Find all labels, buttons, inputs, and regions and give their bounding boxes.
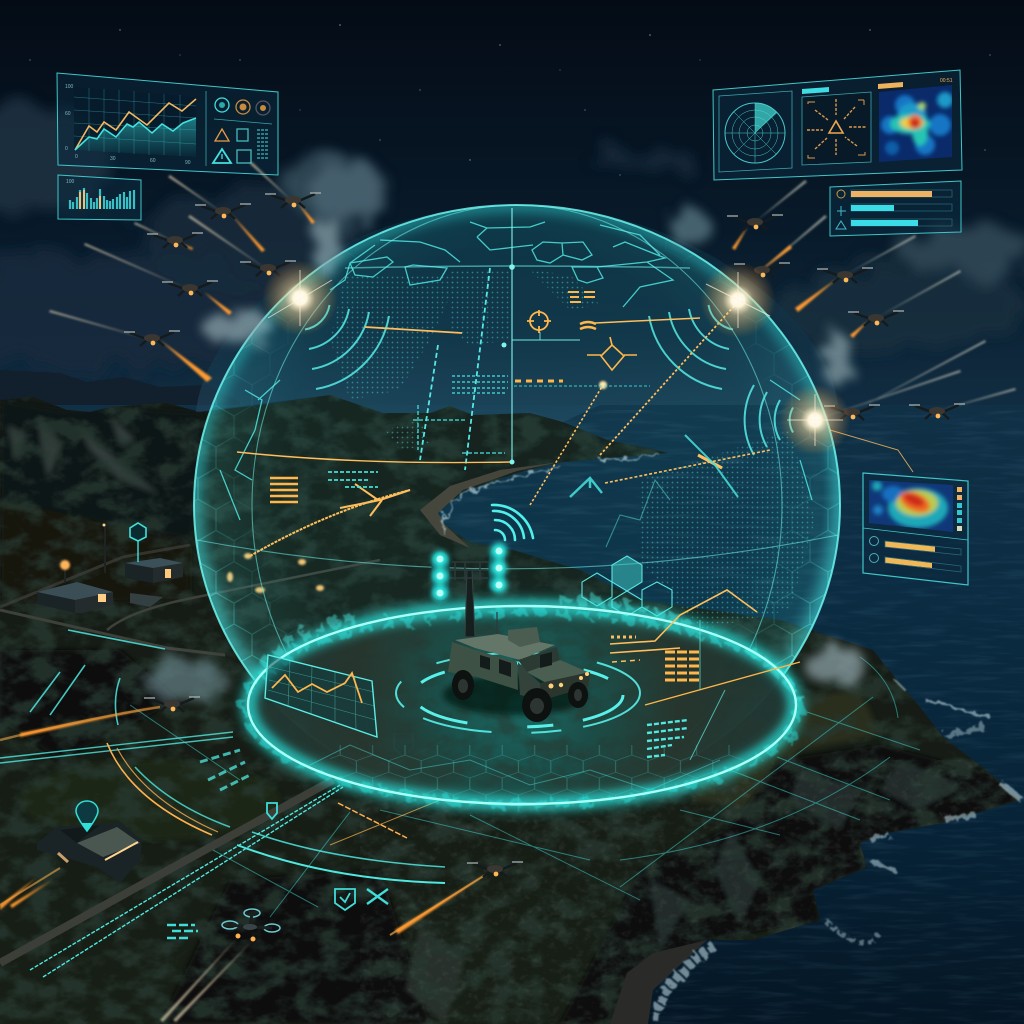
energy ring core (248, 606, 796, 804)
axis labels: 60 (150, 158, 156, 164)
vehicle shadow (443, 675, 587, 715)
drones (124, 193, 965, 877)
terrain shading (0, 400, 1020, 1024)
hex mesh on sphere (195, 252, 839, 665)
status icons (213, 98, 270, 163)
panel: small bar chart: 100 (66, 179, 75, 185)
area under lines (75, 118, 196, 157)
main meridian line (502, 208, 580, 464)
threat heat map (878, 82, 953, 162)
panel: line chart dashboard (57, 73, 278, 175)
quadcopter lower left (222, 909, 280, 942)
HUD: orange data bars (270, 292, 596, 502)
HUD inside dome right (610, 590, 800, 760)
sea ripple texture (440, 410, 1024, 1024)
beach and surf (420, 455, 1022, 1024)
land (0, 395, 1020, 1024)
axis labels: 60 (65, 111, 71, 117)
sphere rim (194, 205, 840, 805)
panel: status bars (830, 181, 961, 236)
building: lower left bunker (37, 822, 142, 883)
cyan ground lines (0, 630, 445, 977)
chart grid (74, 88, 196, 156)
far mountains (0, 370, 240, 430)
orange ground trajectories (0, 707, 485, 935)
icon: wifi signal (492, 505, 533, 540)
building: left base (37, 582, 113, 613)
orange line (75, 99, 196, 150)
sea (0, 405, 1024, 1024)
dome floor (250, 607, 794, 803)
building: right base (125, 553, 324, 607)
panel: thermal map with gauges (863, 473, 968, 585)
panel: small bar chart (58, 175, 141, 220)
icons: ground shields (167, 734, 413, 938)
hex cluster right of vehicle (582, 480, 672, 616)
dotted world map (330, 270, 815, 630)
drone flames (0, 203, 868, 934)
tower lights (60, 524, 106, 583)
radar scope (719, 91, 792, 172)
armored vehicle (448, 627, 590, 722)
antenna light pods (432, 543, 507, 601)
floor hex mesh (300, 745, 750, 805)
roads (0, 545, 420, 963)
axis labels: 90 (185, 160, 191, 166)
stars (29, 24, 991, 176)
axis labels (65, 84, 191, 166)
hand mesh at top of sphere (220, 222, 812, 520)
meridians and latitude lines (197, 205, 838, 653)
axis labels: 0 (75, 154, 78, 160)
icon: location pin top (130, 523, 146, 562)
drone exhaust trails (49, 162, 1016, 1022)
dashed meridian (420, 268, 490, 470)
mast and antenna (449, 562, 497, 637)
floor vegetation texture (398, 616, 628, 794)
floor rim wash (250, 607, 794, 803)
HUD: target reticle (527, 310, 551, 333)
tracer spark (599, 381, 607, 389)
rock grain (360, 760, 1024, 1024)
vehicle radar rings (396, 653, 640, 733)
smoke plumes (145, 158, 867, 702)
icon: location pin bottom (76, 801, 98, 831)
shock arcs (305, 305, 793, 455)
axis labels: 0 (65, 146, 68, 152)
ground grid lines (130, 657, 920, 917)
sphere: interior sky tint (196, 205, 838, 422)
threat warning tile (802, 87, 871, 165)
axis labels: 30 (110, 156, 116, 162)
impact flashes (262, 260, 851, 456)
inner rim glow (195, 206, 839, 682)
fire ring around dome base (244, 600, 800, 804)
panel: radar and threat dashboard: 00:51 (940, 78, 953, 84)
axis labels: 100 (65, 84, 74, 90)
panel: radar and threat dashboard (713, 70, 962, 180)
HUD: orange tracking lines (237, 305, 913, 556)
clouds (0, 105, 1024, 370)
cyan line (75, 118, 196, 150)
HUD: cyan data blocks (328, 376, 738, 497)
HUD: diamond marker (587, 337, 637, 370)
hologram chart in dome (265, 655, 377, 737)
sphere: glass shell (180, 200, 860, 810)
vegetation texture (0, 396, 1020, 1024)
energy ring glow (248, 606, 796, 804)
background: night sky (0, 0, 1024, 460)
